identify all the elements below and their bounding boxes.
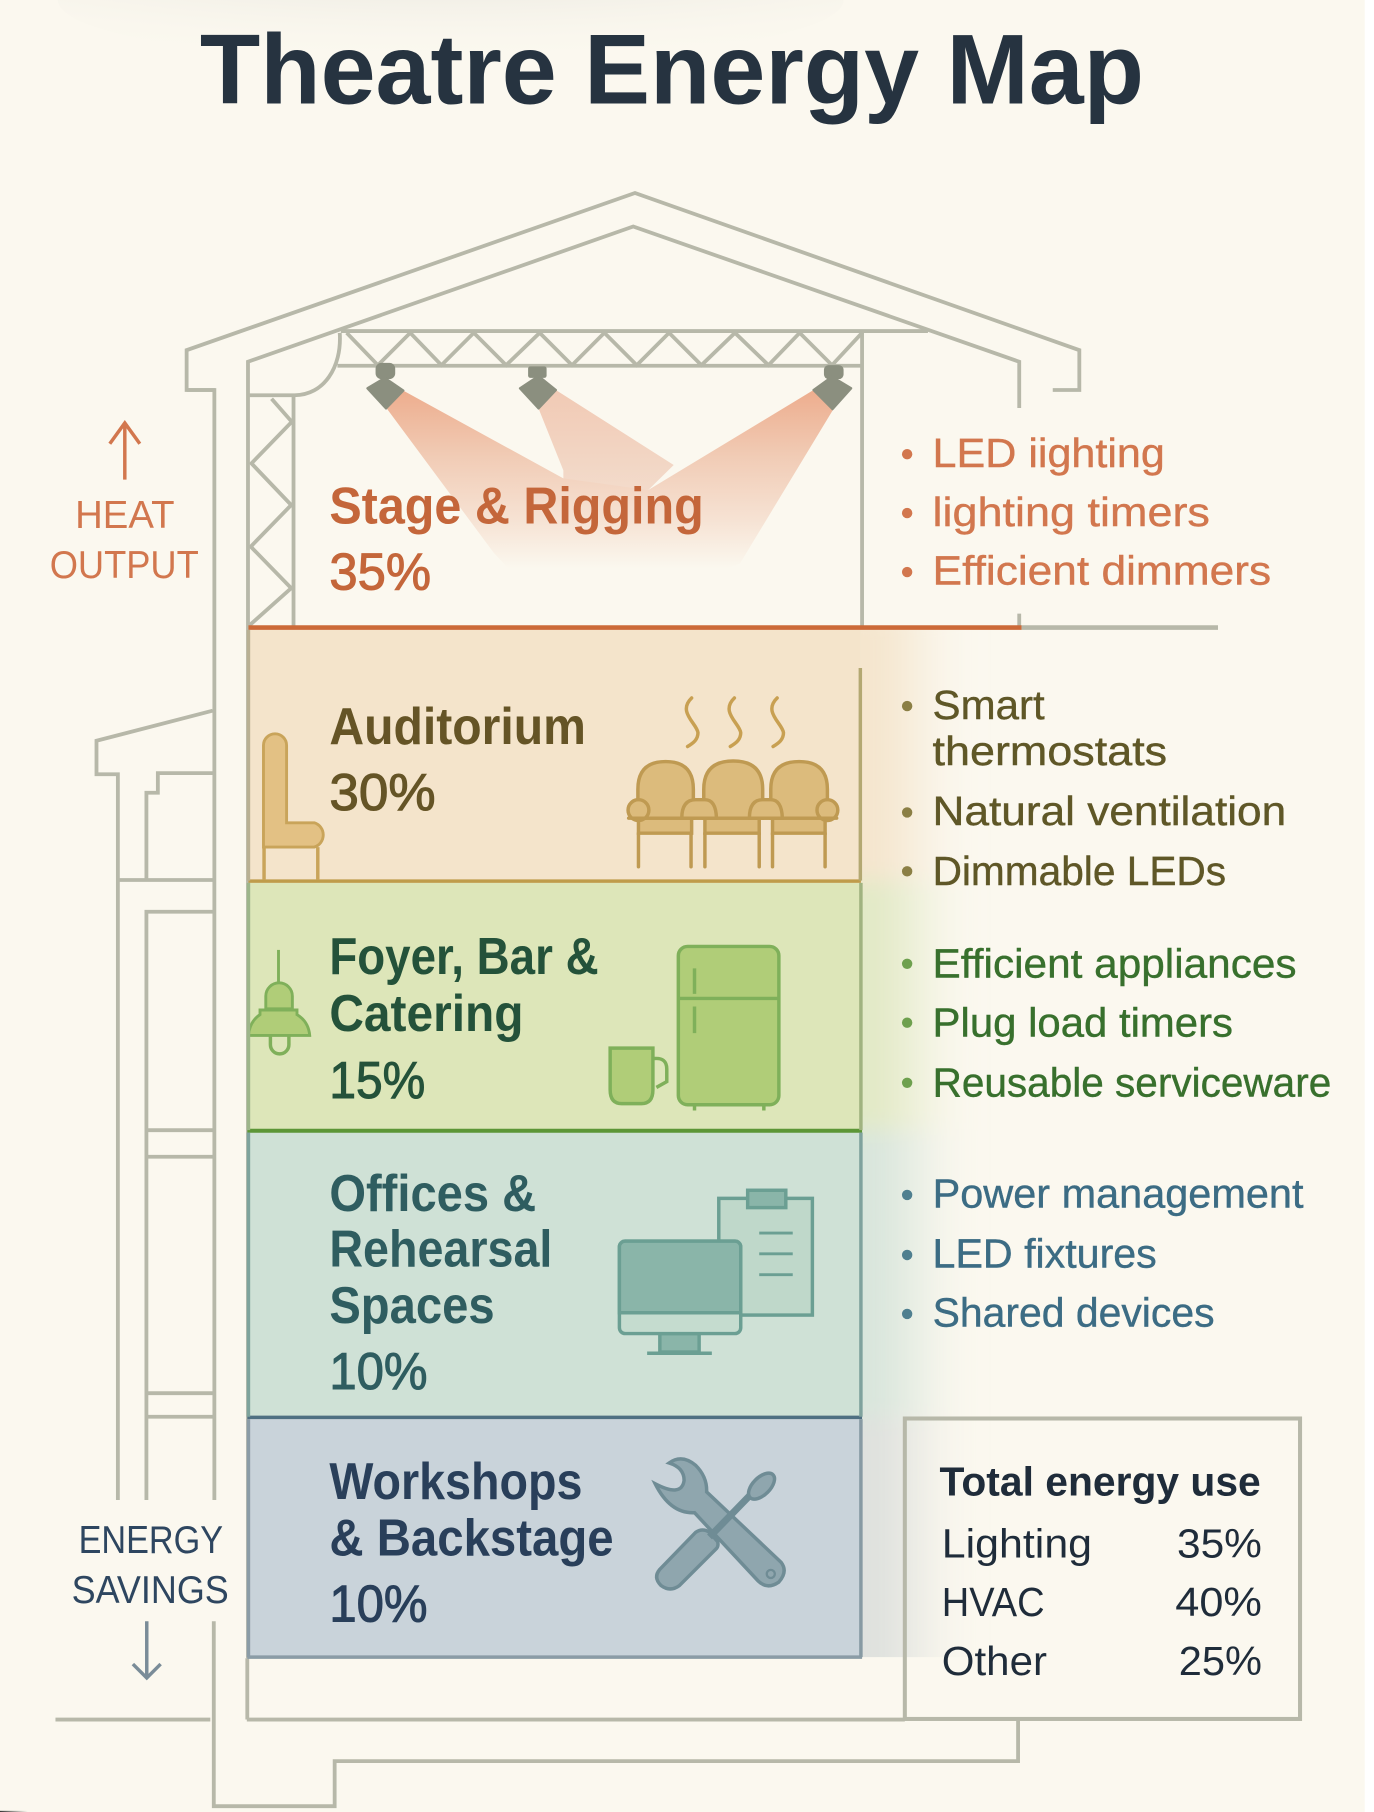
zone fades to the right of the building [861,630,940,1657]
heat text: OUTPUT [50,543,199,587]
label [329,1165,552,1335]
light beams [387,390,833,569]
row: hvac [942,1579,1262,1625]
label: Workshops [329,1453,582,1511]
row: other: 25% [1179,1638,1262,1684]
savings text: ENERGY [79,1518,223,1562]
label: Offices & [329,1165,536,1223]
building outline [55,193,1079,1806]
list: auditorium measures: thermostats [933,728,1167,774]
list: foyer measures: Reusable serviceware [933,1060,1331,1106]
icon: clipboard [719,1190,812,1315]
label: Rehearsal [329,1221,552,1279]
zone divider lines [247,628,1218,1657]
panel: stage and rigging [329,363,851,601]
list: stage measures [902,430,1271,594]
row: hvac: 40% [1175,1579,1262,1625]
icon: pendant lamp [248,950,310,1054]
panel: total energy use [905,1419,1300,1719]
label: Foyer, Bar & [329,928,599,986]
list: foyer measures: Efficient appliances [933,941,1297,987]
heat text [50,493,199,587]
label: Spaces [329,1277,495,1335]
arrow: heat up [110,423,140,480]
list: auditorium measures: Natural ventilation [933,788,1286,834]
percentage: 10% [329,1575,428,1633]
side annex [96,711,213,1500]
energy savings annotation [72,1518,229,1678]
row: other: Other [942,1638,1047,1684]
savings text [72,1518,229,1612]
icon: computer monitor [619,1241,741,1353]
row: hvac: HVAC [942,1579,1045,1625]
row: lighting [942,1521,1262,1567]
list: stage measures: Efficient dimmers [933,548,1271,594]
icon: refrigerator [678,946,779,1111]
panel: auditorium [248,630,861,881]
heat text: HEAT [75,493,174,537]
list: auditorium measures: Dimmable LEDs [933,848,1226,894]
stage right wall [860,332,864,628]
list: offices measures: Shared devices [933,1290,1215,1336]
heat output annotation [50,423,199,587]
ground line [55,1658,905,1720]
label: & Backstage [329,1509,614,1567]
list: auditorium measures [902,682,1286,894]
spotlights [367,363,851,409]
percentage: 15% [329,1052,425,1110]
list: auditorium measures: Smart [933,682,1045,728]
percentage: 10% [329,1343,428,1401]
label: Catering [329,985,523,1043]
proscenium curve [248,333,340,395]
panel: foyer, bar and catering [248,883,861,1130]
label [329,1453,614,1567]
savings text: SAVINGS [72,1568,229,1612]
row: lighting: 35% [1177,1521,1262,1567]
arrow: savings down [133,1621,161,1678]
roof outer [187,193,1079,390]
row: lighting: Lighting [942,1521,1092,1567]
label [329,928,599,1043]
icon: heat steam [686,698,783,747]
percentage: 35% [329,543,431,601]
list: offices measures: LED fixtures [933,1231,1157,1277]
list: foyer measures [902,941,1331,1106]
icon: wrench and screwdriver [655,1459,784,1589]
title: Theatre Energy Map [200,14,1144,125]
truss [337,331,928,366]
panel: offices and rehearsal spaces [248,1132,861,1417]
row: other [942,1638,1262,1684]
main left wall [187,390,1018,1806]
icon: side chair [263,734,323,879]
roof inner [248,227,1019,1658]
label: Stage & Rigging [329,477,704,535]
wall tick [1018,614,1021,628]
left truss [250,396,294,628]
icon: row of seats [628,761,838,867]
list: stage measures: LED iighting [933,430,1165,476]
top shading [58,0,844,64]
list: foyer measures: Plug load timers [933,1000,1233,1046]
panel: workshops and backstage [248,1419,861,1657]
percentage: 30% [329,764,436,822]
icon: mug [610,1048,667,1104]
heading: Total energy use [939,1458,1261,1504]
list: offices measures [902,1171,1304,1336]
list: stage measures: lighting timers [933,489,1210,535]
list: offices measures: Power management [933,1171,1304,1217]
label: Auditorium [329,698,586,756]
